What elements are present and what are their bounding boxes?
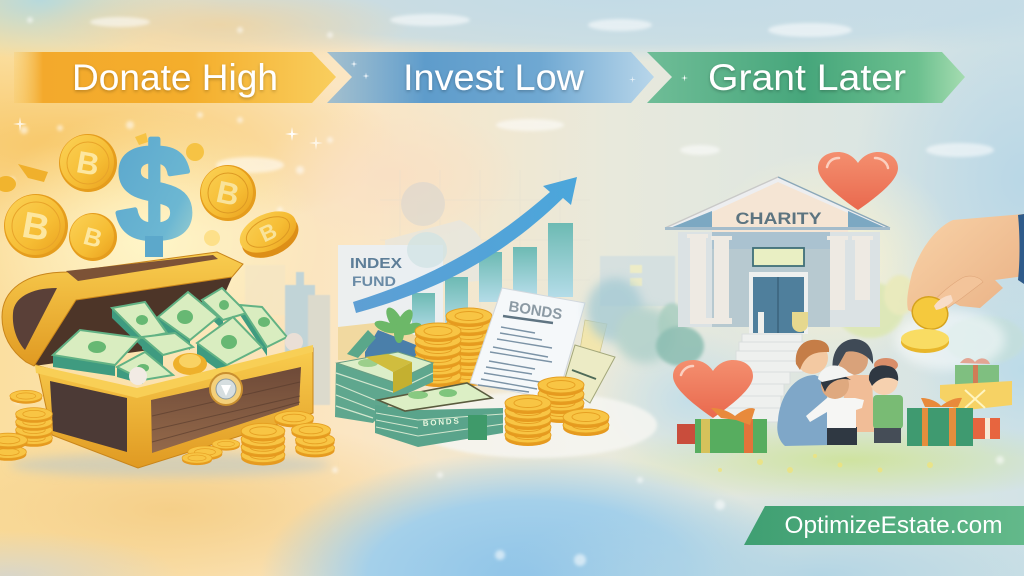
chevron: Invest Low	[327, 52, 654, 103]
gold coin stacks	[0, 390, 335, 465]
bonds document: BONDS	[507, 298, 563, 323]
panel: donate high (treasure chest)	[0, 117, 335, 477]
icon: heart with gift	[673, 360, 767, 453]
index fund document	[338, 232, 447, 345]
right stacked gifts	[907, 358, 1012, 446]
chevron: Grant Later: Grant Later	[708, 57, 906, 98]
adult in denim	[777, 340, 830, 446]
plant box	[338, 305, 423, 360]
bonds document	[470, 288, 585, 400]
bitcoin coins: B	[80, 222, 105, 254]
columns	[687, 234, 873, 324]
child in green	[869, 358, 903, 443]
arrow: rising growth	[353, 177, 577, 313]
ghost building and tree	[600, 256, 675, 306]
chevron: Invest Low: Invest Low	[403, 57, 584, 98]
bitcoin coins: B	[19, 204, 53, 249]
adult with dark hair	[833, 339, 874, 432]
index fund document: INDEX	[350, 255, 402, 272]
chevron: Donate High: Donate High	[72, 57, 278, 98]
bar chart	[412, 223, 573, 333]
panel: grant later (charity)	[656, 152, 1024, 473]
banner: three chevrons	[14, 52, 965, 103]
website badge: OptimizeEstate.com	[784, 512, 1002, 539]
ground glow	[10, 453, 330, 477]
building pediment	[665, 177, 890, 232]
chevron: Grant Later	[647, 52, 965, 103]
charity building	[665, 177, 890, 422]
building name: CHARITY	[736, 209, 822, 228]
bitcoin coins: B	[256, 218, 281, 247]
bitcoin coins	[0, 133, 305, 266]
chart grid and ghost person	[380, 170, 590, 330]
coin stacks behind	[415, 308, 492, 387]
chest body	[35, 345, 313, 468]
front coin stacks	[505, 377, 609, 446]
plate under stacks	[413, 392, 657, 458]
cash stack labelled bonds: BONDS	[423, 416, 460, 428]
cash in chest	[53, 288, 303, 385]
door	[749, 272, 808, 334]
ground sparkle dots	[718, 454, 933, 473]
icon: heart above building	[818, 152, 898, 210]
icon: hand dropping coin	[895, 214, 1024, 370]
trees	[656, 275, 1024, 366]
bitcoin coins: B	[74, 144, 102, 183]
background skyline (left)	[245, 265, 330, 405]
bond paper stack	[563, 320, 615, 403]
cash stack with yellow band	[335, 352, 433, 423]
chest lid	[2, 252, 243, 366]
steps	[712, 334, 806, 422]
icon: dollar sign: $	[116, 117, 192, 269]
website badge	[744, 506, 1024, 545]
chevron: Donate High	[14, 52, 336, 103]
index fund document: FUND	[352, 273, 396, 289]
family group	[777, 339, 903, 446]
bitcoin coins: B	[213, 174, 242, 213]
cash stack labelled bonds	[375, 383, 503, 447]
window	[753, 248, 804, 266]
panel: invest low (index fund and bonds)	[335, 170, 675, 458]
child in white hat	[806, 366, 864, 445]
